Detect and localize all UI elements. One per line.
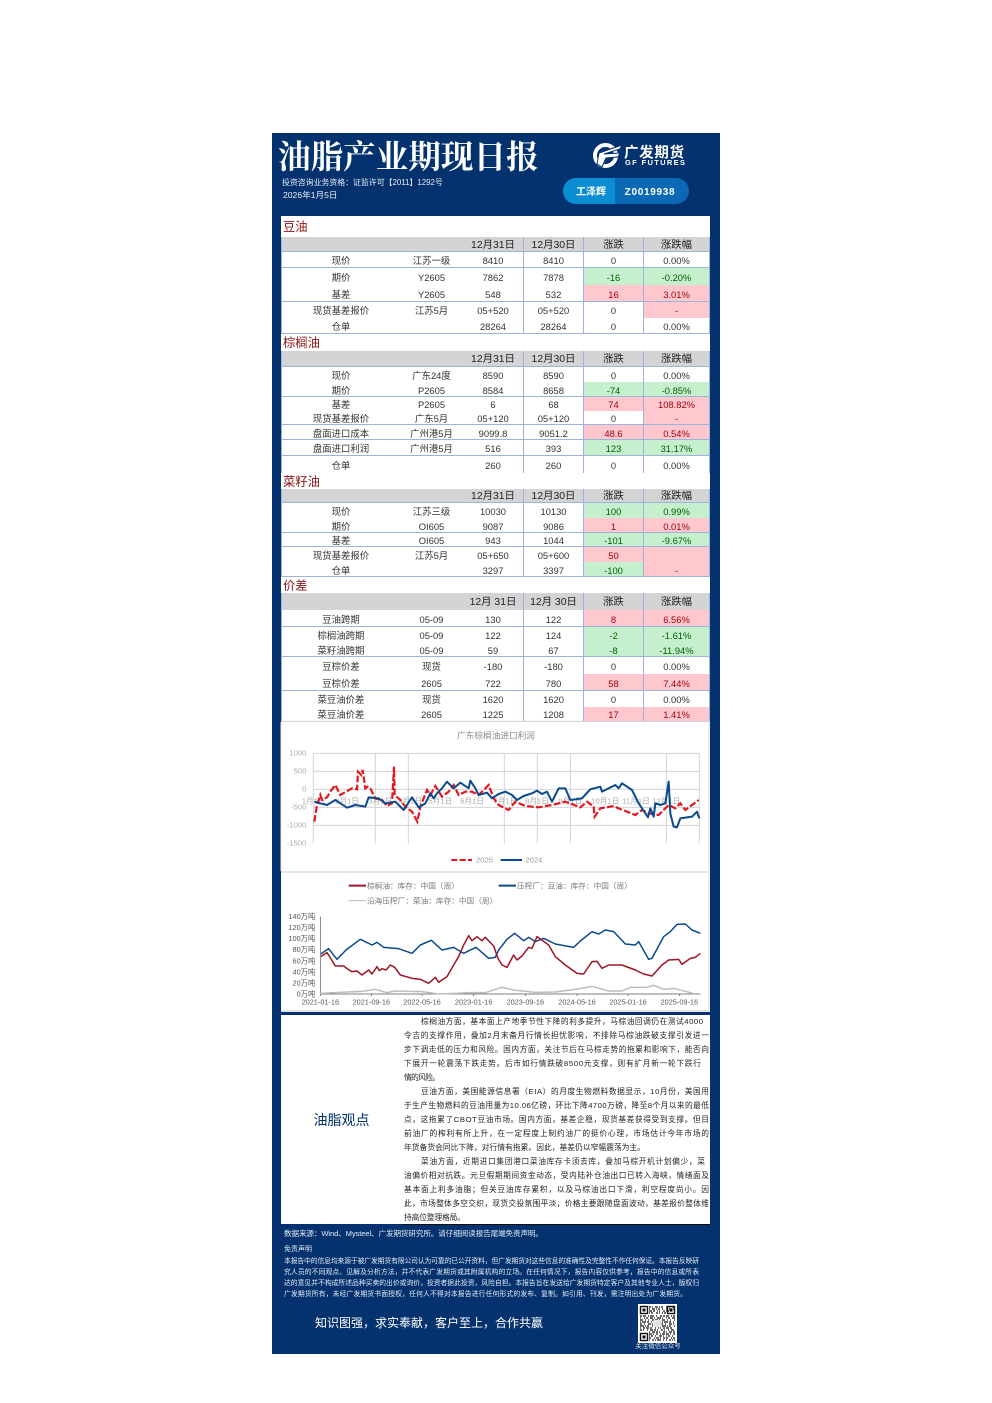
table: 豆油: 3.01% bbox=[663, 289, 690, 300]
chart: 广东棕榈油进口利润: 1月1日 bbox=[302, 797, 326, 806]
table: 豆油: 28264 bbox=[540, 321, 567, 332]
table: 价差: 2605 bbox=[421, 709, 442, 720]
table: 棕榈油: 0 bbox=[611, 460, 616, 471]
table: 价差: 豆棕价差 bbox=[322, 678, 360, 689]
chart: 广东棕榈油进口利润: 9月1日 bbox=[558, 797, 582, 806]
table: 菜籽油: 基差 bbox=[332, 535, 350, 546]
table: 价差: -180 bbox=[484, 661, 502, 672]
table: 豆油: 0 bbox=[611, 321, 616, 332]
slogan: 知识图强，求实奉献，客户至上，合作共赢 bbox=[315, 1316, 543, 1330]
table: 菜籽油: 江苏5月 bbox=[415, 550, 448, 561]
table: 棕榈油: 0.54% bbox=[663, 428, 690, 439]
text block: market commentary: 基本面上利多油脂；但关豆油库存累积，以及马棕油出口下滑，利空程度尚小。因 bbox=[404, 1184, 709, 1194]
analyst pill bbox=[563, 178, 689, 204]
text block: market commentary: 油偏价相对抗跌。元旦假期期间资金动态，受内陆补仓油出口已转入海峡，情绪面及 bbox=[404, 1170, 709, 1180]
table: 棕榈油: 0.00% bbox=[663, 460, 690, 471]
text block: market commentary: 于生产生物燃料的豆油用量为10.06亿磅，环比下降4700万磅，降至8个月以来的最低 bbox=[404, 1100, 709, 1110]
table: 豆油: 05+520 bbox=[477, 305, 509, 316]
table: 价差: 现货 bbox=[422, 694, 441, 705]
table: 价差: 1620 bbox=[483, 694, 503, 705]
text block: market commentary: 此，市场整体多空交织，现货交投氛围平淡，价格主要跟随盘面波动，基差报价整体维 bbox=[404, 1198, 709, 1208]
chart: 油脂库存: 100万吨 bbox=[288, 934, 316, 943]
chart: 油脂库存: 2021-01-16 bbox=[302, 997, 339, 1006]
table: 棕榈油: 涨跌幅 bbox=[661, 354, 692, 365]
table: 价差: 0 bbox=[611, 661, 616, 672]
table: 豆油: 0.00% bbox=[663, 255, 690, 266]
footer: source and disclaimer: 免责声明 bbox=[284, 1244, 312, 1253]
table: 菜籽油: 现货基差报价 bbox=[313, 550, 369, 561]
table: 棕榈油: -74 bbox=[607, 385, 620, 396]
table: 棕榈油: 期价 bbox=[332, 385, 350, 396]
chart: 油脂库存: 2023-09-16 bbox=[507, 997, 544, 1006]
table: 豆油: 涨跌幅 bbox=[661, 240, 692, 251]
table: 价差: 棕榈油跨期 bbox=[318, 630, 364, 641]
table: 价差: 722 bbox=[485, 678, 501, 689]
chart: 油脂库存: 2023-01-16 bbox=[455, 997, 492, 1006]
table: 菜籽油: 涨跌 bbox=[603, 491, 624, 502]
chart: 广东棕榈油进口利润: 10月1日 bbox=[591, 797, 619, 806]
table: 豆油: -16 bbox=[607, 272, 620, 283]
chart: 广东棕榈油进口利润: 2月1日 bbox=[335, 797, 359, 806]
table: 菜籽油: 江苏三级 bbox=[413, 506, 450, 517]
table: 豆油: 基差 bbox=[332, 289, 350, 300]
heading: 油脂观点: 油脂观点 bbox=[314, 1112, 370, 1128]
table: 价差: 菜豆油价差 bbox=[318, 709, 364, 720]
table: 菜籽油: 12月31日 bbox=[471, 491, 515, 502]
chart: 油脂库存: 0万吨 bbox=[297, 990, 316, 999]
table: 豆油: 0.00% bbox=[663, 321, 690, 332]
table: 价差: 130 bbox=[485, 614, 501, 625]
analyst pill: 工泽辉 bbox=[576, 187, 606, 198]
table: 豆油: 涨跌 bbox=[603, 240, 624, 251]
table: 菜籽油: 期价 bbox=[332, 521, 350, 532]
table: 菜籽油: 05+650 bbox=[477, 550, 509, 561]
table: 价差: 59 bbox=[488, 645, 498, 656]
table: 菜籽油: 12月30日 bbox=[532, 491, 575, 502]
chart: 油脂库存: 20万吨 bbox=[293, 978, 316, 987]
table: 菜籽油: 3297 bbox=[483, 565, 503, 576]
chart: 广东棕榈油进口利润: 1000 bbox=[289, 748, 306, 757]
table: 棕榈油: 0 bbox=[611, 370, 616, 381]
chart: 油脂库存: 140万吨 bbox=[288, 912, 316, 921]
table: 菜籽油: 05+600 bbox=[538, 550, 569, 561]
chart: 广东棕榈油进口利润: 0 bbox=[302, 784, 306, 793]
text block: market commentary: 步下调走低的压力和风险。国内方面，关注节后在马棕走势的拖累和影响下，能否向 bbox=[404, 1044, 709, 1054]
table: 豆油 bbox=[281, 220, 710, 334]
table: 棕榈油: 棕榈油 bbox=[283, 336, 320, 350]
table: 价差: 05-09 bbox=[420, 630, 443, 641]
table: 豆油: 现货基差报价 bbox=[313, 305, 369, 316]
text block: market commentary: 持高位整理格局。 bbox=[404, 1212, 465, 1222]
table: 豆油: -0.20% bbox=[662, 272, 691, 283]
table: 棕榈油: - bbox=[675, 413, 678, 424]
report date: 2026年1月5日 bbox=[283, 190, 337, 200]
table: 菜籽油: 0.99% bbox=[663, 506, 690, 517]
table: 棕榈油: 05+120 bbox=[477, 413, 509, 424]
footer: source and disclaimer bbox=[284, 1228, 699, 1298]
table: 价差: 780 bbox=[546, 678, 561, 689]
logo: GF Futures: 广发期货 bbox=[624, 144, 684, 162]
table: 价差: 豆棕价差 bbox=[322, 661, 360, 672]
table: 价差: 7.44% bbox=[663, 678, 690, 689]
chart: 广东棕榈油进口利润: 11月1日 bbox=[622, 797, 650, 806]
table: 棕榈油: 广东5月 bbox=[415, 413, 448, 424]
chart: 广东棕榈油进口利润: 5月1日 bbox=[428, 797, 452, 806]
chart: 油脂库存: 2024-05-16 bbox=[558, 997, 596, 1006]
icon: QR code bbox=[638, 1304, 677, 1343]
table: 豆油: 期价 bbox=[332, 272, 350, 283]
panel: white data tables background bbox=[281, 216, 710, 1012]
text block: market commentary bbox=[403, 1016, 710, 1225]
table: 棕榈油: 9099.8 bbox=[479, 428, 507, 439]
table: 价差: 豆油跨期 bbox=[322, 614, 360, 625]
table: 棕榈油: P2605 bbox=[418, 385, 445, 396]
table: 价差: 17 bbox=[608, 709, 619, 720]
table: 豆油: 江苏一级 bbox=[413, 255, 450, 266]
table: 棕榈油: 广东24度 bbox=[412, 370, 451, 381]
table: 棕榈油: 12月30日 bbox=[532, 354, 575, 365]
table: 棕榈油: 0 bbox=[611, 413, 616, 424]
table: 豆油: 8410 bbox=[543, 255, 564, 266]
table: 豆油: 7862 bbox=[483, 272, 503, 283]
chart: 广东棕榈油进口利润: 500 bbox=[294, 766, 306, 775]
table: 棕榈油: 盘面进口利润 bbox=[313, 443, 369, 454]
table: 棕榈油: 8590 bbox=[543, 370, 564, 381]
table: 豆油: 28264 bbox=[480, 321, 506, 332]
table: 菜籽油: 1 bbox=[611, 521, 616, 532]
table: 豆油: Y2605 bbox=[418, 289, 445, 300]
table: 价差: -180 bbox=[544, 661, 563, 672]
table: 价差: 1620 bbox=[543, 694, 564, 705]
table: 棕榈油: 涨跌 bbox=[603, 354, 624, 365]
table: 菜籽油 bbox=[281, 475, 710, 577]
table: 豆油: - bbox=[675, 305, 678, 316]
table: 棕榈油: 12月31日 bbox=[471, 354, 515, 365]
table: 菜籽油: -100 bbox=[604, 565, 623, 576]
table: 豆油: 12月31日 bbox=[471, 240, 515, 251]
table: 棕榈油: 基差 bbox=[332, 399, 350, 410]
footer: source and disclaimer: 广发期货所有，未经广发期货书面授权，任何人不得对本报告进行任何形式的发布、复制。如引用、刊发，需注明出处为广发期货。 bbox=[284, 1289, 687, 1298]
table: 菜籽油: 100 bbox=[606, 506, 621, 517]
table: 价差: 0.00% bbox=[663, 694, 690, 705]
text block: market commentary: 棕榈油方面，基本面上产地季节性下降的利多提升，马棕油回调仍在测试4000 bbox=[421, 1016, 703, 1026]
text block: market commentary: 令吉的支撑作用，叠加2月末斋月行情长担忧影响，不排除马棕油跌破支撑引发进一 bbox=[404, 1030, 709, 1040]
chart: 广东棕榈油进口利润: 6月1日 bbox=[460, 797, 484, 806]
analyst pill: Z0019938 bbox=[625, 187, 675, 198]
chart: 广东棕榈油进口利润: -500 bbox=[291, 802, 306, 811]
table: 豆油: 0 bbox=[611, 305, 616, 316]
table: 价差: 0 bbox=[611, 694, 616, 705]
table: 棕榈油: 0.00% bbox=[663, 370, 690, 381]
table: 棕榈油: 现价 bbox=[332, 370, 350, 381]
table: 价差: 1208 bbox=[543, 709, 564, 720]
logo: GF Futures: GF FUTURES bbox=[625, 158, 685, 167]
table: 菜籽油: 3397 bbox=[543, 565, 564, 576]
text block: market commentary: 年货备货会同比下降，对行情有拖累。因此，基差仍以窄幅震荡为主。 bbox=[404, 1142, 645, 1152]
table: 价差: 现货 bbox=[422, 661, 441, 672]
table: 棕榈油: 260 bbox=[546, 460, 561, 471]
table: 棕榈油: 68 bbox=[548, 399, 559, 410]
table: 棕榈油: 仓单 bbox=[332, 460, 350, 471]
table: 菜籽油: 943 bbox=[485, 535, 501, 546]
table: 菜籽油: 1044 bbox=[543, 535, 564, 546]
table: 价差: 122 bbox=[485, 630, 501, 641]
table: 豆油: 16 bbox=[608, 289, 619, 300]
table: 价差: -2 bbox=[609, 630, 618, 641]
table: 豆油: Y2605 bbox=[418, 272, 445, 283]
table: 菜籽油: 50 bbox=[608, 550, 619, 561]
QR caption: 关注微信公众号 bbox=[635, 1343, 681, 1350]
chart: 油脂库存: 沿海压榨厂：菜油：库存：中国（周） bbox=[367, 895, 497, 905]
table: 菜籽油: OI605 bbox=[419, 535, 444, 546]
table: 棕榈油: 现货基差报价 bbox=[313, 413, 369, 424]
table: 菜籽油: 0.01% bbox=[663, 521, 690, 532]
table: 菜籽油: OI605 bbox=[419, 521, 444, 532]
table: 棕榈油: 广州港5月 bbox=[410, 443, 453, 454]
chart: 广东棕榈油进口利润: -1500 bbox=[287, 838, 306, 847]
table: 价差: 菜籽油跨期 bbox=[318, 645, 364, 656]
table: 棕榈油: 盘面进口成本 bbox=[313, 428, 369, 439]
table: 棕榈油: 8584 bbox=[483, 385, 503, 396]
table: 棕榈油: -0.85% bbox=[662, 385, 691, 396]
panel: 油脂观点 bbox=[281, 1015, 710, 1224]
footer: source and disclaimer: 达的意见并不构成所述品种买卖的出价或询价，投资者据此投资，风险自担。本报告旨在发送给广发期货特定客户及其他专业人士，版权归 bbox=[284, 1278, 699, 1287]
table: 豆油: 豆油 bbox=[283, 220, 308, 234]
panel: navy report background bbox=[272, 133, 720, 1354]
table: 价差: 2605 bbox=[421, 678, 442, 689]
table: 价差: -11.94% bbox=[659, 645, 694, 656]
qualification note: 投资咨询业务资格：证监许可【2011】1292号 bbox=[282, 178, 443, 187]
chart: 油脂库存: 60万吨 bbox=[293, 956, 316, 965]
table: 价差: 6.56% bbox=[663, 614, 690, 625]
chart: 广东棕榈油进口利润: 12月1日 bbox=[652, 797, 680, 806]
chart: 广东棕榈油进口利润 bbox=[280, 720, 710, 872]
table: 价差: 67 bbox=[548, 645, 559, 656]
table: 价差: 涨跌 bbox=[603, 597, 624, 608]
table: 豆油: 江苏5月 bbox=[415, 305, 448, 316]
chart: 油脂库存: 80万吨 bbox=[293, 945, 316, 954]
table: 棕榈油: 108.82% bbox=[658, 399, 695, 410]
text block: market commentary: 前油厂的榨利有所上升，在一定程度上制约油厂的挺价心理，市场估计今年市场的 bbox=[404, 1128, 709, 1138]
footer: source and disclaimer: 究人员的不同观点、见解及分析方法，并不代表广发期货或其附属机构的立场。在任何情况下，报告内容仅供参考，报告中的信息或所表 bbox=[284, 1267, 699, 1276]
table: 菜籽油: 仓单 bbox=[332, 565, 350, 576]
chart: 油脂库存: 2025-01-16 bbox=[609, 997, 647, 1006]
table: 棕榈油: 393 bbox=[546, 443, 561, 454]
table: 菜籽油: 10030 bbox=[480, 506, 506, 517]
table: 价差: 05-09 bbox=[420, 645, 443, 656]
table: 价差: 05-09 bbox=[420, 614, 443, 625]
table: 价差: -8 bbox=[609, 645, 618, 656]
chart: 油脂库存: 棕榈油：库存：中国（周） bbox=[367, 880, 459, 890]
text block: market commentary: 点，这拖累了CBOT豆油市场。国内方面，基差企稳，现货基差获得受到支撑。但目 bbox=[404, 1114, 709, 1124]
footer: source and disclaimer: 本报告中的信息均来源于被广发期货有限公司认为可靠的已公开资料，但广发期货对这些信息的准确性及完整性不作任何保证。本报告反映研 bbox=[284, 1256, 699, 1265]
table: 棕榈油: 31.17% bbox=[661, 443, 692, 454]
table: 价差 bbox=[281, 579, 710, 721]
table: 菜籽油: - bbox=[675, 565, 678, 576]
table: 豆油: 8410 bbox=[483, 255, 503, 266]
table: 豆油: 现价 bbox=[332, 255, 350, 266]
logo: GF Futures bbox=[593, 143, 685, 168]
table: 菜籽油: 菜籽油 bbox=[283, 475, 320, 489]
table: 价差: 122 bbox=[546, 614, 561, 625]
table: 价差: 124 bbox=[546, 630, 561, 641]
table: 豆油: 仓单 bbox=[332, 321, 350, 332]
chart: 油脂库存: 压榨厂：豆油：库存：中国（周） bbox=[517, 880, 632, 890]
table: 菜籽油: 9086 bbox=[543, 521, 564, 532]
table: 豆油: 532 bbox=[546, 289, 561, 300]
text block: market commentary: 菜油方面，近期进口集团港口菜油库存卡须去库，叠加马棕开机计划偏少，菜 bbox=[421, 1156, 705, 1166]
chart: 油脂库存: 120万吨 bbox=[288, 923, 316, 932]
table: 棕榈油: 123 bbox=[606, 443, 621, 454]
chart: 油脂库存: 2021-09-16 bbox=[353, 997, 390, 1006]
chart: 油脂库存: 2025-09-16 bbox=[661, 997, 698, 1006]
chart: 油脂库存: 2022-05-16 bbox=[403, 997, 441, 1006]
table: 棕榈油: 05+120 bbox=[538, 413, 569, 424]
table: 价差: 价差 bbox=[283, 579, 308, 593]
chart: 油脂库存 bbox=[281, 873, 710, 1012]
table: 菜籽油: 9087 bbox=[483, 521, 503, 532]
chart: 广东棕榈油进口利润: 8月1日 bbox=[525, 797, 549, 806]
table: 棕榈油: 74 bbox=[608, 399, 619, 410]
chart: 油脂库存: 40万吨 bbox=[293, 967, 316, 976]
table: 价差: -1.61% bbox=[662, 630, 691, 641]
chart: 广东棕榈油进口利润: 2024 bbox=[525, 856, 543, 865]
table: 棕榈油 bbox=[281, 336, 710, 473]
table: 价差: 菜豆油价差 bbox=[318, 694, 364, 705]
title: 油脂产业期现日报 bbox=[278, 140, 539, 176]
table: 棕榈油: 8658 bbox=[543, 385, 564, 396]
table: 棕榈油: 8590 bbox=[483, 370, 503, 381]
chart: 广东棕榈油进口利润: 7月1日 bbox=[493, 797, 517, 806]
table: 豆油: 0 bbox=[611, 255, 616, 266]
table: 豆油: 548 bbox=[485, 289, 501, 300]
table: 豆油: 7878 bbox=[543, 272, 564, 283]
text block: market commentary: 豆油方面，美国能源信息署（EIA）的月度生物燃料数据显示，10月份，美国用 bbox=[421, 1086, 709, 1096]
table: 棕榈油: 48.6 bbox=[604, 428, 623, 439]
table: 菜籽油: -9.67% bbox=[662, 535, 691, 546]
table: 价差: 12月 30日 bbox=[530, 597, 577, 608]
table: 菜籽油: 10130 bbox=[540, 506, 567, 517]
text block: market commentary: 下展开一轮震荡下跌走势。后市如行情跌破8500元支撑，则有扩月新一轮下跌行 bbox=[404, 1058, 701, 1068]
table: 价差: 1.41% bbox=[663, 709, 690, 720]
table: 豆油: 05+520 bbox=[538, 305, 569, 316]
table: 豆油: 12月30日 bbox=[532, 240, 575, 251]
table: 价差: 12月 31日 bbox=[470, 597, 516, 608]
table: 菜籽油: -101 bbox=[604, 535, 623, 546]
table: 价差: 0.00% bbox=[663, 661, 690, 672]
table: 棕榈油: 9051.2 bbox=[539, 428, 568, 439]
chart: 广东棕榈油进口利润: 3月1日 bbox=[368, 797, 392, 806]
table: 价差: 58 bbox=[608, 678, 619, 689]
table: 棕榈油: 6 bbox=[490, 399, 496, 410]
table: 棕榈油: 广州港5月 bbox=[410, 428, 453, 439]
table: 菜籽油: 涨跌幅 bbox=[661, 491, 692, 502]
chart: 广东棕榈油进口利润: 4月1日 bbox=[398, 797, 422, 806]
chart: 广东棕榈油进口利润: 2025 bbox=[476, 856, 493, 865]
table: 棕榈油: 516 bbox=[485, 443, 501, 454]
text block: market commentary: 情的风险。 bbox=[404, 1072, 440, 1082]
table: 价差: 8 bbox=[611, 614, 616, 625]
table: 棕榈油: 260 bbox=[485, 460, 501, 471]
table: 棕榈油: P2605 bbox=[418, 399, 445, 410]
table: 价差: 1225 bbox=[483, 709, 503, 720]
footer: source and disclaimer: 数据来源：Wind、Mysteel、广发期货研究所。请仔细阅读报告尾端免责声明。 bbox=[284, 1228, 543, 1238]
chart: 广东棕榈油进口利润: -1000 bbox=[287, 820, 306, 829]
table: 菜籽油: 现价 bbox=[332, 506, 350, 517]
chart: 广东棕榈油进口利润: 广东棕榈油进口利润 bbox=[457, 730, 535, 741]
table: 价差: 涨跌幅 bbox=[661, 597, 692, 608]
